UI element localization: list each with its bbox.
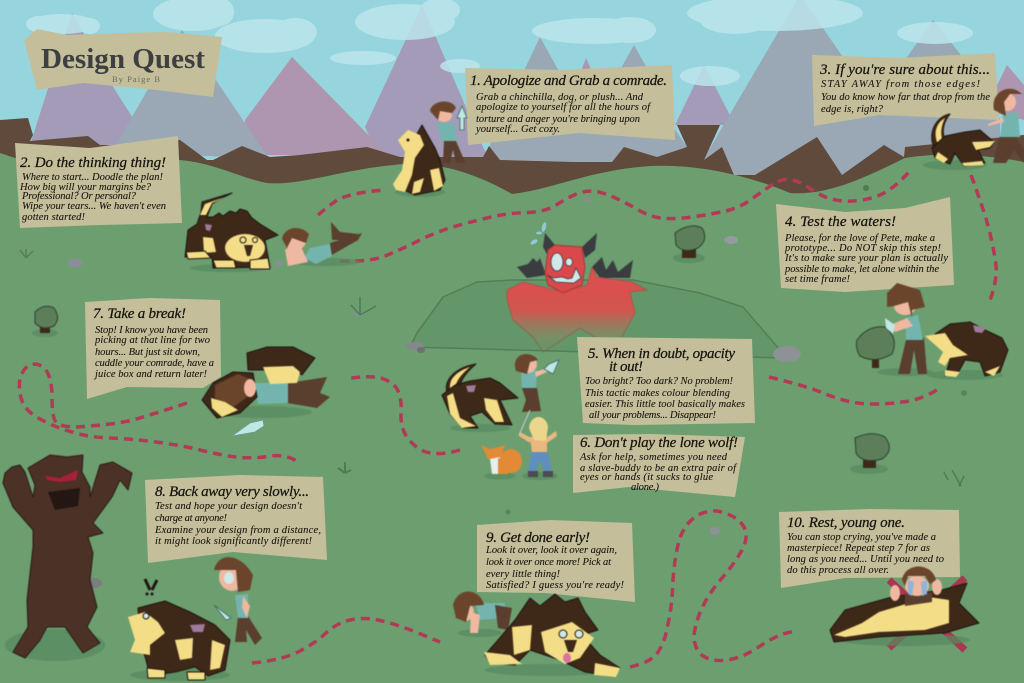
character: person at the edge xyxy=(988,89,1024,163)
body: easier. This little tool basically makes xyxy=(585,399,745,410)
character: cowering wolf xyxy=(442,364,518,432)
body: all your problems... Disappear! xyxy=(589,410,716,421)
heading: 6. Don't play the lone wolf! xyxy=(580,435,738,451)
character: person crawling, inspecting xyxy=(453,591,512,637)
character: person with tree and prototype xyxy=(856,283,933,376)
body xyxy=(485,545,624,591)
character: red demon fading out xyxy=(507,233,647,352)
tree 3 xyxy=(850,434,889,474)
character: startled wolf xyxy=(128,579,230,681)
character: sitting wolf xyxy=(393,125,445,197)
tree 2 xyxy=(673,226,705,263)
note 9: done early xyxy=(477,520,635,602)
body: Grab a chinchilla, dog, or plush... And xyxy=(476,92,644,103)
dashed path: segment 9 to 10 xyxy=(630,511,795,667)
note 10: rest xyxy=(779,509,960,588)
body: Ask for help, sometimes you need xyxy=(579,452,728,463)
dashed path: segment 8 to 9 xyxy=(252,618,440,663)
body: Please, for the love of Pete, make a xyxy=(784,233,935,244)
dashed path: segment 7 loop to 8 xyxy=(19,364,298,462)
dashed path: segment 4 to 5 xyxy=(769,377,939,404)
body: alone.) xyxy=(631,482,660,493)
author credit: By Paige B xyxy=(112,74,160,84)
character: person backing away xyxy=(214,557,262,645)
heading: 7. Take a break! xyxy=(93,306,186,322)
character: shaggy brown bear xyxy=(3,455,132,661)
heading: 5. When in doubt, opacity xyxy=(588,346,735,362)
character: fox xyxy=(481,445,522,480)
body: masterpiece! Repeat step 7 for as xyxy=(787,543,930,554)
character: person with spear xyxy=(515,354,559,412)
body: possible to make, let alone within the xyxy=(784,264,939,275)
body: charge at anyone! xyxy=(155,513,228,524)
body: eyes or hands (it sucks to glue xyxy=(580,472,713,483)
dashed path: segment 5 to 7 xyxy=(345,377,460,454)
heading: 4. Test the waters! xyxy=(785,214,896,230)
body: picking at that line for two xyxy=(94,335,210,346)
body: look it over once more! Pick at xyxy=(486,557,612,568)
heading: 9. Get done early! xyxy=(486,530,590,546)
body: hours... But just sit down, xyxy=(95,347,200,358)
demon eyes and teeth xyxy=(547,253,581,283)
body xyxy=(821,79,990,115)
body: edge is, right? xyxy=(821,104,884,115)
brown ridge xyxy=(0,118,1024,220)
body: Too bright? Too dark? No problem! xyxy=(585,376,734,387)
body: Professional? Or personal? xyxy=(21,191,137,202)
character: collapsed wolf with crying person xyxy=(830,566,979,646)
note 1: apologize xyxy=(465,65,675,145)
icon: dropped arrow head xyxy=(232,420,264,436)
droplets of sweat xyxy=(530,222,547,246)
demon head xyxy=(545,245,585,293)
body: Satisfied? I guess you're ready! xyxy=(486,580,624,591)
body: How big will your margins be? xyxy=(19,182,152,193)
body: Where to start... Doodle the plan! xyxy=(22,172,164,183)
body: Wipe your tears... We haven't even xyxy=(22,201,166,212)
body: yourself... Get cozy. xyxy=(475,124,560,135)
heading: 1. Apologize and Grab a comrade. xyxy=(470,73,667,89)
body: juice box and return later! xyxy=(93,369,208,380)
character: person lying on stomach xyxy=(282,222,362,266)
green ground xyxy=(0,153,1024,683)
body: set time frame! xyxy=(785,274,850,285)
heading: 2. Do the thinking thing! xyxy=(20,155,166,171)
body xyxy=(787,532,944,576)
note 3: edges xyxy=(812,53,999,126)
tree 1 xyxy=(32,306,58,337)
dashed path: segment 3 to 4 xyxy=(971,175,996,303)
icon: red X marks the spot xyxy=(889,578,965,650)
note 5: opacity xyxy=(577,337,755,425)
body: STAY AWAY from those edges! xyxy=(821,79,980,90)
note 4: test xyxy=(776,197,954,292)
demon horns and spikes xyxy=(517,233,633,278)
character: wolf at the edge xyxy=(923,114,995,170)
body: Examine your design from a distance, xyxy=(154,525,321,536)
body xyxy=(154,501,321,547)
rocks and grass tufts xyxy=(20,185,967,588)
body: every little thing! xyxy=(486,569,560,580)
note 6: lone wolf xyxy=(573,434,745,497)
body: You do know how far that drop from the xyxy=(821,92,990,103)
body: apologize to yourself for all the hours of xyxy=(476,102,652,113)
title banner xyxy=(24,29,222,97)
body: You can stop crying, you've made a xyxy=(787,532,936,543)
body: It's to make sure your plan is actually xyxy=(784,253,948,264)
title text: Design Quest xyxy=(41,43,205,75)
body xyxy=(784,233,948,285)
mountains xyxy=(30,0,1024,175)
heading: 10. Rest, young one. xyxy=(787,515,905,531)
dashed path: segment 2 to 3 xyxy=(340,172,909,261)
character: blond helper xyxy=(519,410,558,480)
character: wolf and person cuddling xyxy=(202,347,330,418)
note 7: break xyxy=(85,298,221,399)
body: prototype... Do NOT skip this step! xyxy=(784,243,942,254)
body: cuddle your comrade, have a xyxy=(95,358,214,369)
body: Stop! I know you have been xyxy=(95,325,208,336)
heading: 3. If you're sure about this... xyxy=(819,62,990,78)
character: wolf peering close xyxy=(484,594,620,677)
body xyxy=(93,325,214,380)
note 8: back away xyxy=(145,475,327,563)
dashed path: segment 1 to 2 xyxy=(318,190,385,215)
character: lying wolf xyxy=(185,193,278,272)
note 2: thinking xyxy=(15,136,182,228)
heading xyxy=(588,346,735,375)
central hill xyxy=(410,280,780,358)
clouds xyxy=(26,0,973,86)
body: Look it over, look it over again, xyxy=(485,545,617,556)
demon body xyxy=(507,267,647,352)
body xyxy=(579,452,738,493)
body: Test and hope your design doesn't xyxy=(155,501,303,512)
body: long as you need... Until you need to xyxy=(787,554,944,565)
body: gotten started! xyxy=(22,212,86,223)
heading: it out! xyxy=(609,359,643,375)
body: torture and anger you're bringing upon xyxy=(476,114,640,125)
body: This tactic makes colour blending xyxy=(585,388,730,399)
body xyxy=(475,92,652,135)
character: person behind sitting wolf, with arrow xyxy=(430,102,467,163)
body xyxy=(585,376,745,421)
body: it might look significantly different! xyxy=(155,536,312,547)
body: do this process all over. xyxy=(787,565,889,576)
heading: 8. Back away very slowly... xyxy=(155,484,309,500)
body: a slave-buddy to be an extra pair of xyxy=(580,463,738,474)
body xyxy=(19,172,166,223)
sky xyxy=(0,0,1024,200)
character: wolf beside the tree xyxy=(925,322,1008,380)
